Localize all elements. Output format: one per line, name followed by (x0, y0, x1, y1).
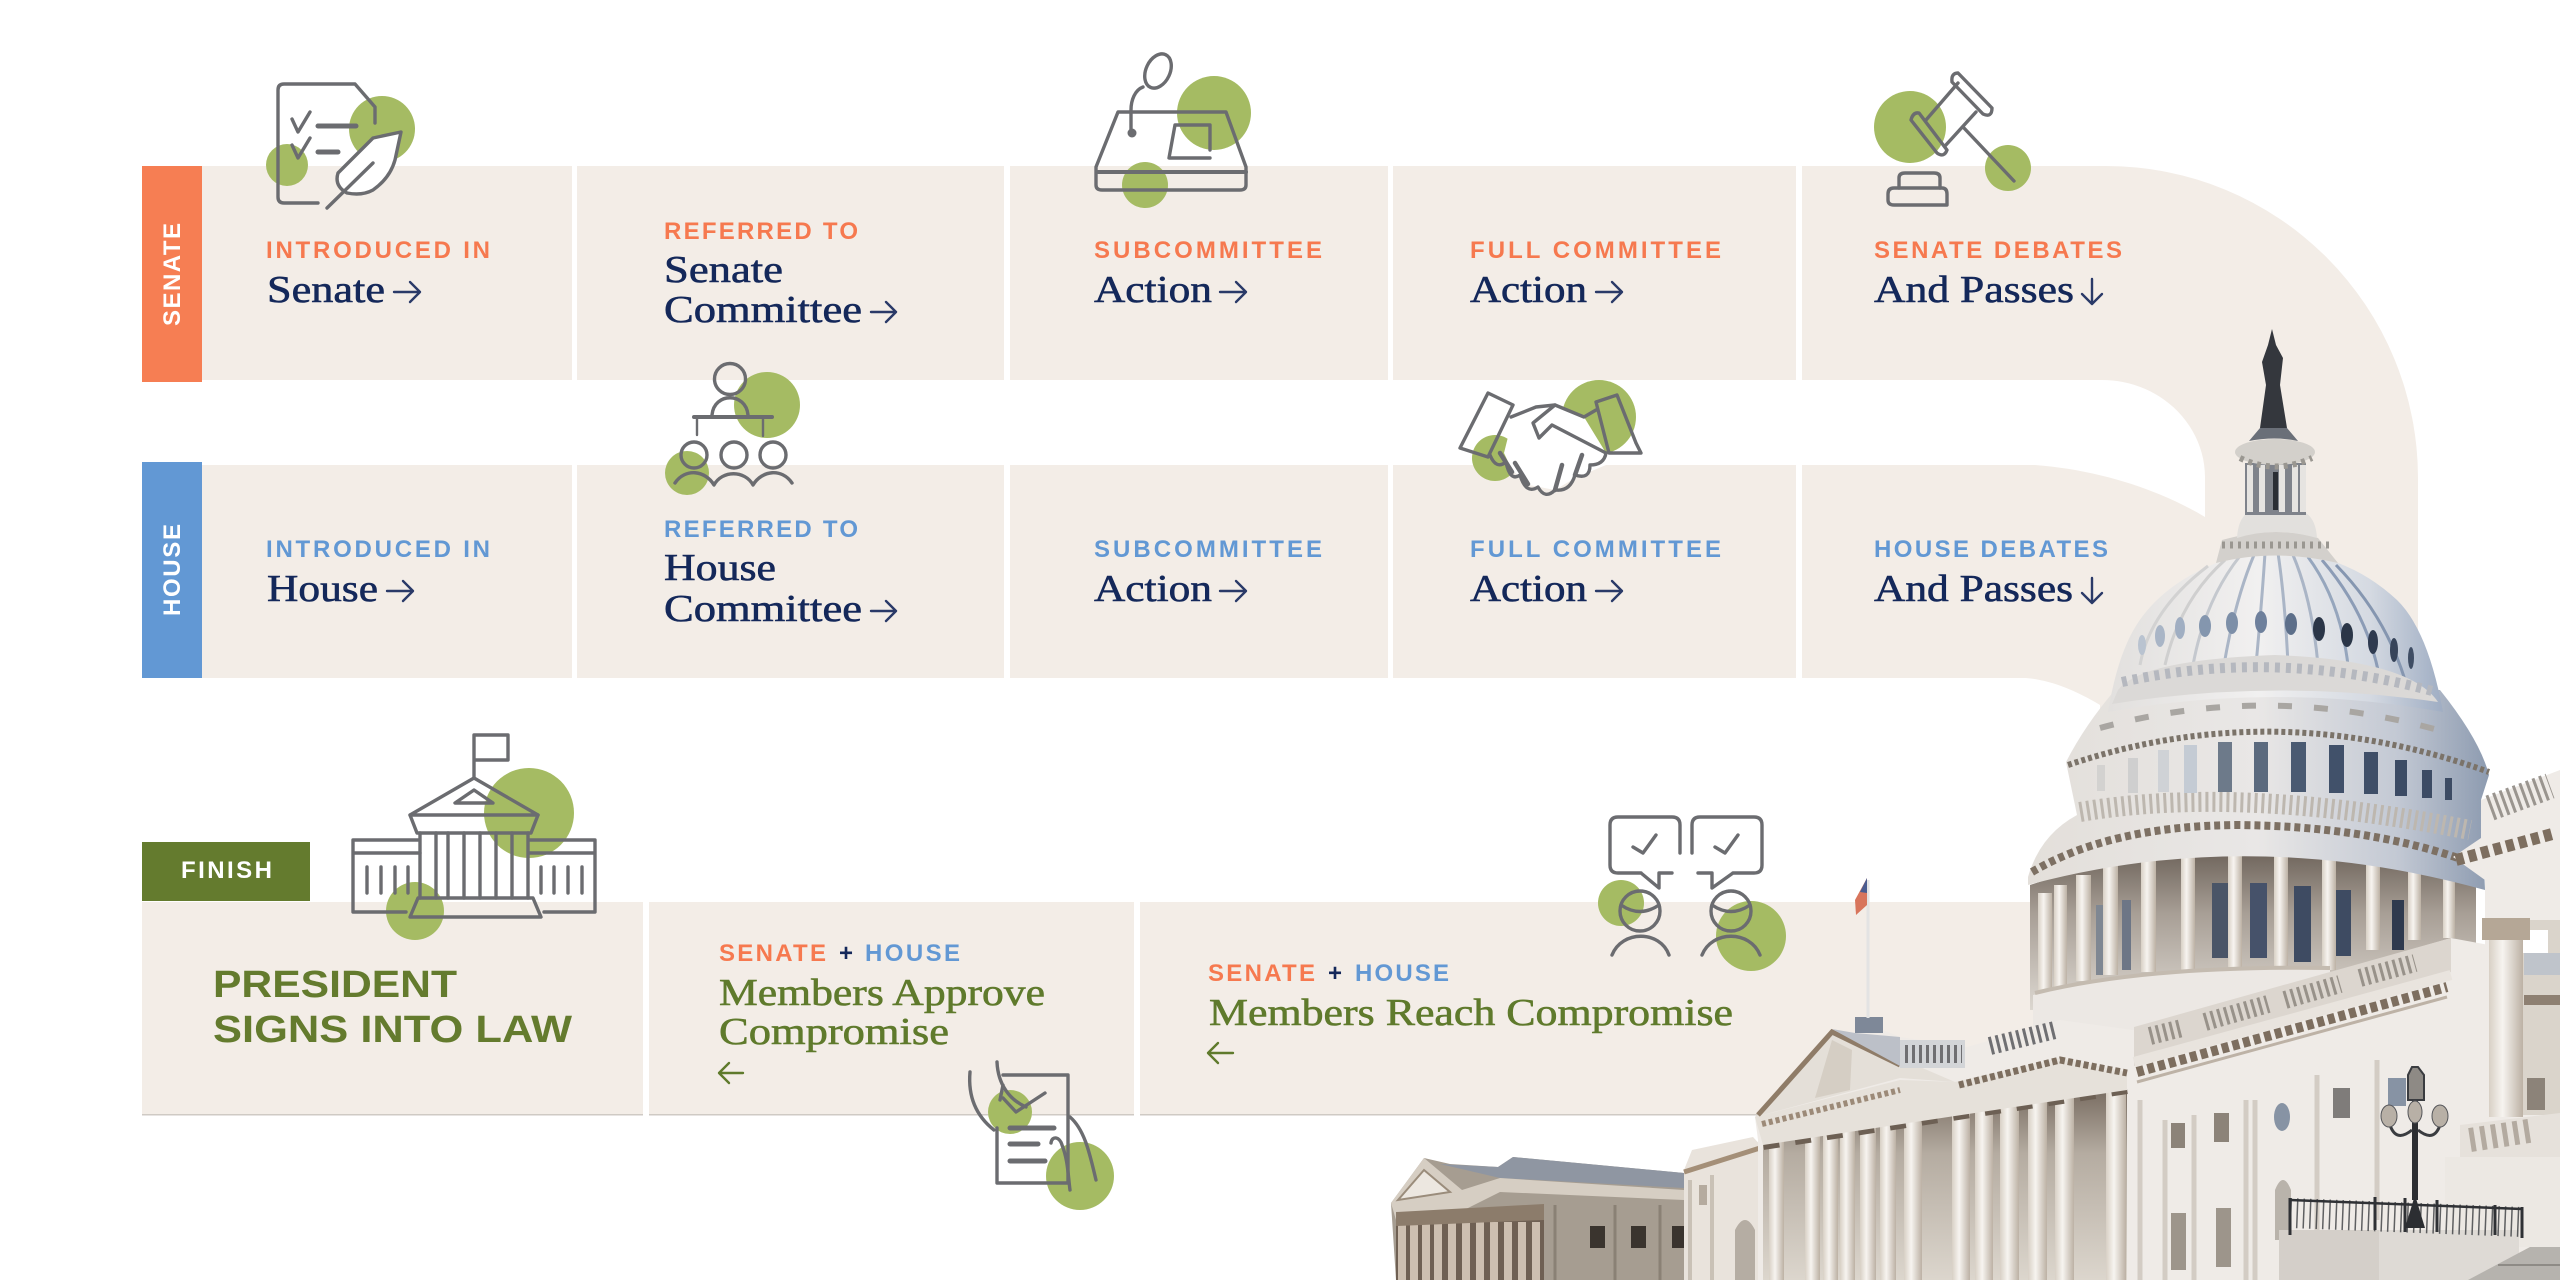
icon: gavel (1874, 73, 2031, 205)
finish tag (142, 842, 310, 901)
upper drum windows (2097, 742, 2452, 800)
icon: handshake (1460, 380, 1641, 494)
icon: checklist and quill (266, 84, 415, 208)
central portico recess (1763, 1086, 2127, 1280)
panel: Referred to House Committee (577, 465, 1004, 678)
panel: Referred to House Committee: REFERRED TO (664, 516, 858, 543)
steps and terrace (2279, 1230, 2560, 1280)
portico entablature and pediment (1755, 1017, 2127, 1145)
street lamp (2381, 1067, 2448, 1228)
text: Senate debates and passes (1874, 237, 2122, 311)
photo: US Capitol building (1391, 329, 2560, 1280)
text: House debates and passes: HOUSE DEBATES (1874, 536, 2108, 563)
icon: podium with microphone (1096, 50, 1251, 208)
icon: two people with speech bubbles (1598, 817, 1786, 971)
lantern and statue (2216, 329, 2338, 563)
middle connecting wing (1684, 1137, 1765, 1280)
text: Senate debates and passes: And Passes (1874, 269, 2074, 311)
flag and flagpole (1855, 878, 1870, 1018)
icon: capitol building (353, 735, 595, 940)
left low wing (1391, 1157, 1684, 1280)
panel: House tab (142, 462, 202, 678)
panel: Referred to Senate Committee (577, 166, 1004, 380)
panel: House subcommittee action: SUBCOMMITTEE (1094, 536, 1322, 563)
panel: Introduced in House (202, 465, 572, 678)
panel: Members approve compromise (649, 902, 1134, 1116)
panel: Members reach compromise: SENATE (1208, 960, 1315, 987)
text: Senate debates and passes: SENATE DEBATES (1874, 237, 2122, 264)
east wing wall (2134, 938, 2451, 1280)
panel: House full committee action: Action (1470, 568, 1587, 610)
panel: curved debate band (1802, 166, 2418, 780)
panel: Members approve compromise: SENATE (719, 940, 826, 967)
panel: Members approve compromise: Members Approve (719, 972, 1045, 1014)
panel: Members reach compromise: Members Reach Compromise (1209, 992, 1733, 1034)
panel: Members reach compromise: + (1328, 960, 1342, 987)
text: House debates and passes: And Passes (1874, 568, 2073, 610)
panel: Senate subcommittee action: Action (1094, 269, 1212, 311)
text: House debates and passes (1874, 536, 2108, 610)
panel: Senate full committee action: FULL COMMITTEE (1470, 237, 1721, 264)
cornice detail (2032, 706, 2489, 872)
drum colonnade (2030, 850, 2476, 1045)
panel: Senate full committee action: Action (1470, 269, 1587, 311)
panel: House tab: HOUSE (159, 524, 186, 616)
panel: Members approve compromise: HOUSE (865, 940, 960, 967)
panel: Introduced in Senate (202, 166, 572, 380)
panel: Senate tab: SENATE (159, 223, 186, 326)
panel: Members reach compromise: HOUSE (1355, 960, 1449, 987)
icon: speaker and audience (665, 364, 800, 495)
panel: President signs into law: PRESIDENT (213, 964, 457, 1006)
dome ribs (2140, 553, 2405, 680)
panel: Introduced in Senate: Senate (267, 269, 385, 311)
panel: House subcommittee action: Action (1094, 568, 1212, 610)
portico columns (1763, 1087, 2127, 1280)
dome window band (2112, 611, 2438, 704)
upper drum and cornice (2028, 690, 2489, 890)
right wing (2445, 770, 2560, 1280)
icon: document held in hands (970, 1062, 1114, 1210)
panel: Referred to Senate Committee: Committee (664, 289, 862, 331)
panel: Referred to House Committee: Committee (664, 588, 862, 630)
panel: Senate subcommittee action (1010, 166, 1388, 380)
panel: Referred to Senate Committee: REFERRED TO (664, 218, 858, 245)
panel: President signs into law: SIGNS INTO LAW (213, 1009, 572, 1051)
dome (2108, 556, 2443, 712)
main block (1755, 938, 2489, 1280)
panel: Introduced in House: House (267, 568, 378, 610)
finish tag: FINISH (181, 857, 272, 884)
panel: Introduced in House: INTRODUCED IN (266, 536, 490, 563)
panel: House full committee action: FULL COMMITTEE (1470, 536, 1721, 563)
panel: Referred to House Committee: House (664, 547, 776, 589)
panel: President signs into law (142, 902, 643, 1116)
panel: Senate tab (142, 166, 202, 382)
panel: Members approve compromise: Compromise (719, 1011, 949, 1053)
panel: Members reach compromise (1140, 902, 2140, 1116)
panel: House subcommittee action (1010, 465, 1388, 678)
panel: House full committee action (1393, 465, 1796, 678)
panel: Members approve compromise: + (839, 940, 853, 967)
panel: Senate subcommittee action: SUBCOMMITTEE (1094, 237, 1322, 264)
panel: Referred to Senate Committee: Senate (664, 249, 783, 291)
panel: Introduced in Senate: INTRODUCED IN (266, 237, 490, 264)
panel: Senate full committee action (1393, 166, 1796, 380)
iron fence (2290, 1197, 2522, 1238)
